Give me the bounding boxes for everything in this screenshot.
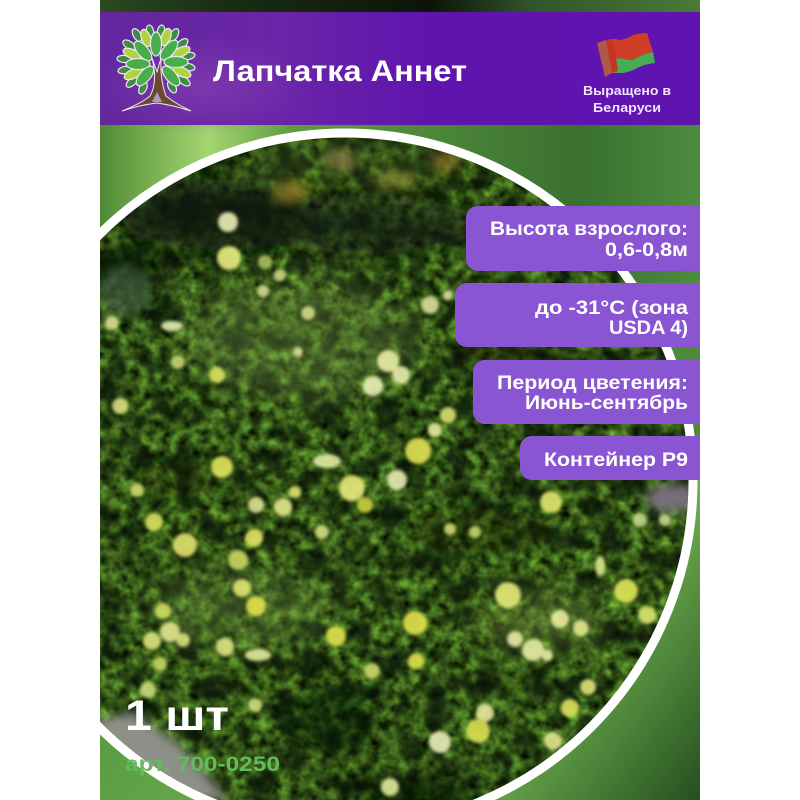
flag caption: [584, 86, 670, 114]
flag caption: Беларуси: [593, 100, 661, 115]
quantity: 1 шт: [125, 692, 229, 740]
shadow and light patches: [75, 142, 600, 800]
rocks: [95, 264, 698, 800]
article number: арт. 700-0250: [125, 753, 280, 776]
badge: frost hardiness: USDA 4): [609, 318, 688, 339]
icon: flag of Belarus: [597, 33, 655, 77]
badge: height: [466, 206, 700, 271]
flowers: [105, 212, 671, 796]
badge: flowering period: [473, 360, 700, 424]
badge: height: 0,6-0,8м: [605, 240, 688, 261]
plant photo: [100, 138, 688, 800]
top strip: [100, 0, 700, 12]
badge: flowering period: Период цветения:: [497, 373, 688, 394]
badge: frost hardiness: [455, 283, 700, 347]
page background: [100, 0, 700, 800]
badge: container: Контейнер Р9: [544, 450, 688, 471]
badge: frost hardiness: до -31°C (зона: [535, 298, 689, 319]
white circular frame: [100, 128, 698, 800]
brown foliage: [272, 150, 459, 203]
crown leaves: [117, 25, 196, 95]
title: Лапчатка Аннет: [213, 55, 467, 88]
logo: tree: [117, 25, 196, 111]
badge: height: Высота взрослого:: [490, 219, 688, 240]
trunk: [122, 58, 191, 111]
badge: flowering period: Июнь-сентябрь: [525, 393, 688, 414]
flag caption: Выращено в: [583, 83, 671, 98]
badge: container: [520, 436, 700, 480]
header band: [90, 12, 700, 135]
